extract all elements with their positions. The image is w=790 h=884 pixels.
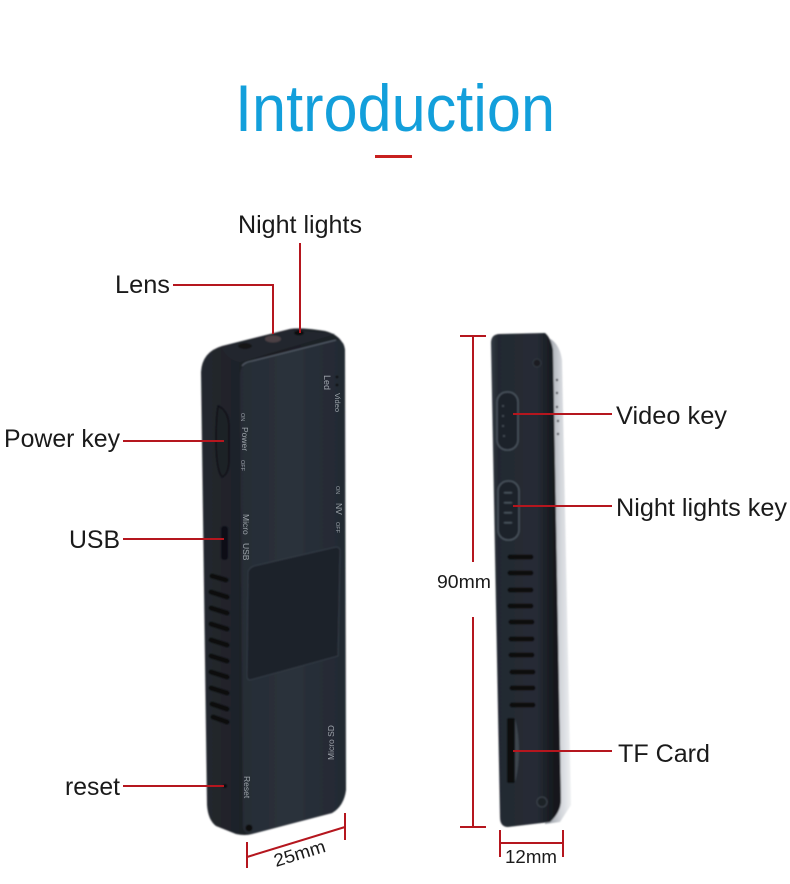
dimension: 90mm height (437, 336, 491, 827)
side view body (491, 333, 561, 827)
reset hole (223, 784, 227, 788)
lens and ports (238, 330, 304, 349)
callout: video key: Video key (616, 402, 728, 430)
callout: night lights (238, 211, 362, 333)
tf card slot (507, 718, 519, 783)
device: front view (201, 328, 346, 835)
callout: reset: reset (65, 773, 120, 801)
dimension: 12mm depth (500, 830, 563, 867)
callout: usb: USB (69, 526, 120, 554)
device printed labels: Video (333, 393, 342, 412)
dimension: 25mm width (247, 813, 345, 871)
night lights key (498, 481, 519, 540)
video key (497, 392, 518, 450)
window panel (247, 547, 340, 680)
title: Introduction (235, 71, 555, 145)
top screw (533, 359, 541, 367)
device printed labels: ON (239, 413, 245, 421)
device: side view (491, 333, 571, 827)
device printed labels: OFF (239, 460, 245, 472)
dimension: 25mm width: 25mm (271, 836, 328, 871)
power switch (216, 406, 229, 477)
side view light rear band (545, 336, 571, 824)
device top edge (222, 330, 335, 362)
device printed labels: NV (334, 503, 344, 515)
dimension: 12mm depth: 12mm (505, 847, 557, 867)
bottom hole (246, 824, 252, 832)
device printed labels: ON (334, 486, 340, 494)
device printed labels: Led (322, 375, 332, 390)
device printed labels (239, 375, 344, 799)
title underline (375, 155, 412, 158)
callout: power key: Power key (4, 425, 120, 453)
led holes (336, 376, 338, 386)
callout: night lights: Night lights (238, 211, 362, 239)
device printed labels: OFF (334, 522, 340, 534)
device printed labels: Reset (242, 776, 252, 799)
side vents (211, 576, 227, 722)
device body side (201, 328, 346, 835)
device printed labels: Power (240, 427, 250, 451)
device printed labels: USB (241, 543, 251, 561)
callout: tf card: TF Card (618, 740, 710, 768)
screw (537, 797, 547, 807)
dimension: 90mm height: 90mm (437, 572, 491, 592)
callout: night lights key: Night lights key (616, 494, 787, 522)
front face highlight (242, 340, 336, 366)
side view vents (510, 557, 533, 705)
device printed labels: Micro (241, 514, 251, 535)
callout: lens (115, 271, 273, 334)
device printed labels: Micro SD (326, 725, 336, 760)
side dots (556, 379, 559, 435)
usb port (221, 526, 228, 560)
callout: lens: Lens (115, 271, 170, 299)
device front face (240, 340, 345, 834)
